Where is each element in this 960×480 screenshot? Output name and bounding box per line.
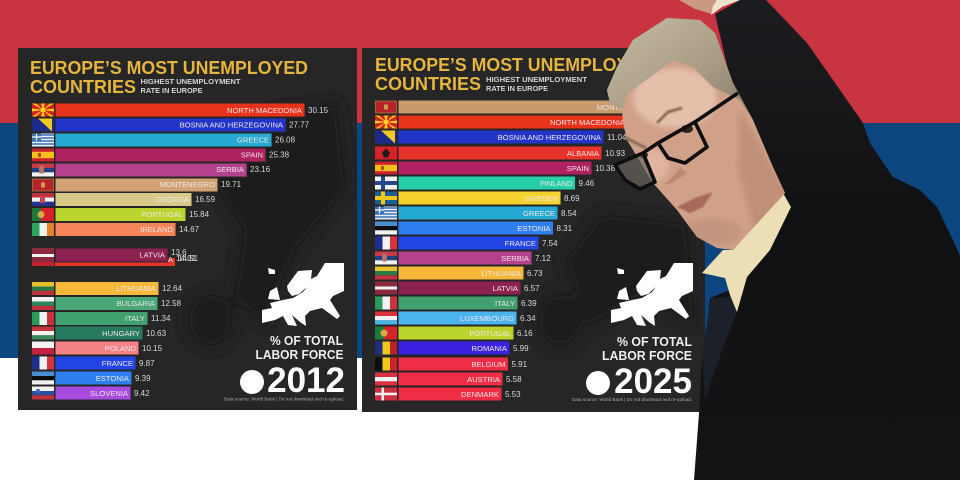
row: Lithuania: LITHUANIA — [116, 284, 157, 293]
row: Slovenia — [32, 386, 150, 400]
title 2012: EUROPE’S MOST UNEMPLOYED — [30, 57, 308, 78]
row: Romania: 5.99 — [513, 344, 529, 353]
row: Estonia 2012: 9.39 — [135, 374, 151, 383]
row: Spain 2025: 10.38 — [595, 164, 616, 173]
row: France 2012: FRANCE — [102, 359, 133, 368]
row: Latvia 2025 — [375, 281, 540, 295]
jacket and raised arm — [694, 0, 960, 480]
title 2025: RATE IN EUROPE — [486, 84, 548, 93]
row: Sweden — [375, 191, 580, 205]
row: Greece 2025: GREECE — [523, 209, 555, 218]
caption: percent of total labor force 2025 — [602, 335, 692, 363]
row: Greece: GREECE — [237, 136, 269, 144]
title 2025: COUNTRIES — [375, 73, 481, 94]
row: Portugal 2025 — [375, 326, 533, 340]
row: Montenegro 2025 — [375, 100, 660, 114]
row: Montenegro 2025: MONTENEGRO — [597, 103, 652, 112]
row: Denmark: 5.53 — [505, 390, 521, 399]
row: Belgium — [375, 357, 528, 371]
row: Austria: AUSTRIA — [467, 375, 501, 384]
row: Spain 2025: SPAIN — [567, 164, 589, 173]
row: Italy 2012: 11.34 — [151, 314, 171, 323]
row: Albania — [375, 146, 626, 160]
row: Croatia: CROATIA — [156, 195, 190, 204]
row: Croatia — [32, 192, 216, 206]
row: Latvia and overlapping Albania: 14.01 — [176, 254, 197, 263]
caption: percent of total labor force 2025: % OF TOTAL — [617, 335, 692, 349]
row: Estonia 2025: 8.31 — [556, 224, 573, 233]
row: Denmark: DENMARK — [461, 390, 499, 399]
icon: Europe map 2025 — [611, 263, 693, 326]
row: Italy 2025: 6.39 — [521, 299, 537, 308]
mouth — [677, 192, 713, 213]
panel: 2012 chart — [18, 48, 357, 410]
year 2012 with dot: 2012 — [267, 361, 345, 400]
row: Bosnia and Herzegovina: BOSNIA AND HERZEGOVINA — [180, 120, 284, 130]
row: Bulgaria: 12.58 — [161, 299, 182, 308]
title 2025: EUROPE’S MOST UNEMPLOYED — [375, 54, 653, 75]
raised hand at top — [679, 0, 717, 14]
row: Italy 2025 — [375, 296, 537, 310]
title 2012: RATE IN EUROPE — [140, 86, 202, 95]
icon: Europe map 2012 — [262, 263, 344, 326]
row: Latvia and overlapping Albania: LATVIA — [139, 250, 166, 260]
row: Poland — [32, 341, 163, 355]
row: Latvia and overlapping Albania: A — [168, 255, 174, 264]
eyebrows and eyes — [626, 108, 693, 158]
row: Greece 2025 — [375, 206, 577, 220]
row: Austria — [375, 372, 522, 386]
row: Estonia 2025: ESTONIA — [517, 224, 551, 233]
row: Estonia 2012: ESTONIA — [96, 374, 130, 383]
title 2012: COUNTRIES — [30, 76, 136, 97]
row: North Macedonia: 30.15 — [308, 106, 329, 115]
row: Bulgaria — [32, 296, 182, 310]
row: Poland: 10.15 — [142, 344, 163, 353]
row: Ireland: 14.67 — [179, 225, 200, 234]
row: Portugal: 15.84 — [189, 210, 210, 219]
row: Lithuania — [32, 282, 183, 296]
row: Portugal 2025: 6.16 — [517, 329, 533, 338]
row: Slovenia: 9.42 — [134, 389, 150, 398]
row: Ireland — [32, 222, 200, 236]
row: Latvia and overlapping Albania: 13.6 — [171, 248, 187, 257]
row: Montenegro — [32, 178, 242, 192]
title 2025: HIGHEST UNEMPLOYMENT — [486, 75, 587, 84]
row: Bosnia and Herzegovina — [32, 118, 310, 132]
row: Portugal — [32, 208, 210, 222]
glasses — [615, 93, 738, 189]
row: Albania: 10.93 — [605, 149, 626, 158]
caption: percent of total labor force: % OF TOTAL — [270, 334, 343, 348]
row: Estonia 2025 — [375, 221, 573, 235]
row: Bosnia and Herzegovina: 27.77 — [289, 120, 310, 130]
row: Italy 2012 — [32, 312, 171, 326]
row: Bulgaria: BULGARIA — [117, 299, 156, 308]
row: Finland: FINLAND — [540, 179, 573, 188]
row: Austria: 5.58 — [506, 375, 522, 384]
row: Italy 2025: ITALY — [495, 299, 515, 308]
row: Sweden: 8.69 — [564, 194, 580, 203]
row: France 2012: 9.87 — [139, 359, 155, 368]
row: Hungary: HUNGARY — [102, 329, 140, 338]
row: France 2012 — [32, 356, 155, 370]
row: Spain — [32, 148, 290, 162]
row: North Macedonia 2025 — [375, 115, 630, 129]
row: Greece 2025: 8.54 — [561, 209, 577, 218]
face — [607, 18, 785, 250]
row: Latvia 2025: 6.57 — [524, 284, 540, 293]
nose shadow — [663, 168, 687, 185]
title 2025 — [375, 54, 653, 94]
row: Poland: POLAND — [105, 344, 137, 353]
row: Finland: 9.46 — [578, 179, 595, 188]
year 2025 with dot: 2025 — [614, 362, 692, 401]
row: Albania: ALBANIA — [567, 149, 600, 158]
row: Slovenia: SLOVENIA — [90, 389, 129, 398]
row: Croatia: 16.59 — [195, 195, 216, 204]
row: Italy 2012: ITALY — [125, 314, 145, 323]
photo: man in dark suit with raised arm — [600, 0, 960, 480]
data source 2025: Data source: World Bank | Do not download and re-upload. — [572, 397, 692, 402]
data source 2012: Data source: World Bank | Do not download and re-upload. — [224, 396, 344, 402]
row: Portugal 2025: PORTUGAL — [469, 329, 511, 338]
row: Luxembourg: 6.34 — [520, 314, 536, 323]
row: Serbia 2025 — [375, 251, 551, 265]
row: Romania — [375, 341, 529, 355]
row: Lithuania: 12.64 — [162, 284, 183, 293]
row: Hungary — [32, 326, 167, 340]
row: Denmark — [375, 387, 521, 401]
row: Latvia and overlapping Albania: 14.51 — [178, 254, 199, 263]
row: Serbia: 23.16 — [250, 165, 271, 174]
row: Lithuania 2025: LITHUANIA — [481, 269, 522, 278]
row: Bosnia and Herzegovina 2025 — [375, 130, 627, 144]
row: Greece: 26.08 — [275, 136, 296, 144]
row: Bosnia and Herzegovina 2025: 11.04 — [607, 133, 627, 142]
row: Lithuania 2025 — [375, 266, 543, 280]
row: Belgium: 5.91 — [512, 360, 528, 369]
title 2012: HIGHEST UNEMPLOYMENT — [140, 77, 241, 86]
row: Serbia 2025: SERBIA — [501, 254, 530, 263]
row: Romania: ROMANIA — [472, 344, 508, 353]
caption: percent of total labor force — [256, 334, 344, 362]
shirt collar — [702, 193, 791, 312]
row: France 2025: 7.54 — [542, 239, 558, 248]
row: North Macedonia: NORTH MACEDONIA — [227, 106, 303, 115]
row: Finland — [375, 176, 595, 190]
row: Hungary: 10.63 — [146, 329, 167, 338]
row: Greece — [32, 133, 296, 147]
row: Luxembourg: LUXEMBOURG — [460, 314, 514, 323]
caption: percent of total labor force 2025: LABOR FORCE — [602, 349, 692, 363]
row: Sweden: SWEDEN — [525, 194, 558, 203]
row: Bosnia and Herzegovina 2025: BOSNIA AND HERZEGOVINA — [498, 133, 602, 142]
row: Luxembourg — [375, 311, 536, 325]
row: Latvia and overlapping Albania — [32, 248, 199, 266]
row: Portugal: PORTUGAL — [141, 210, 183, 219]
row: Latvia 2025: LATVIA — [492, 284, 519, 293]
row: Montenegro: 19.71 — [221, 180, 242, 189]
row: Spain 2025 — [375, 161, 616, 175]
shirt cuff — [711, 0, 740, 15]
panel: 2025 chart — [362, 48, 705, 412]
row: Estonia 2012 — [32, 371, 151, 385]
row: Spain: SPAIN — [241, 150, 263, 160]
row: France 2025 — [375, 236, 558, 250]
row: Spain: 25.38 — [269, 150, 290, 160]
row: North Macedonia — [32, 103, 329, 117]
row: Montenegro: MONTENEGRO — [160, 180, 215, 189]
row: Lithuania 2025: 6.73 — [527, 269, 543, 278]
row: France 2025: FRANCE — [505, 239, 536, 248]
row: Serbia 2025: 7.12 — [535, 254, 551, 263]
title 2012 — [30, 57, 308, 97]
row: Belgium: BELGIUM — [471, 360, 506, 369]
row: Serbia: SERBIA — [216, 165, 245, 174]
row: Ireland: IRELAND — [140, 225, 174, 234]
row: North Macedonia 2025: NORTH MACEDONIA — [550, 118, 626, 127]
hair — [607, 18, 754, 120]
row: Serbia — [32, 163, 271, 177]
caption: percent of total labor force: LABOR FORCE — [256, 348, 344, 362]
